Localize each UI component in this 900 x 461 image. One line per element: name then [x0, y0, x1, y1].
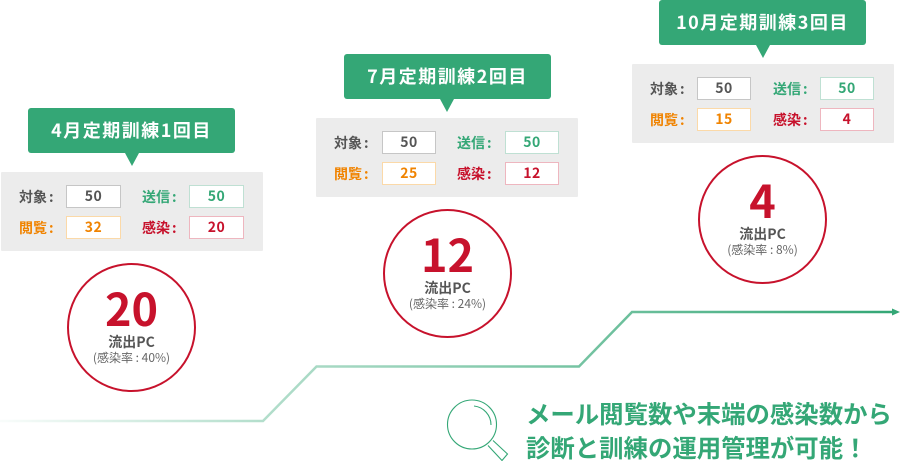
group: April training — [1, 108, 263, 392]
group: October training — [632, 0, 894, 284]
circle: April result: 20 — [105, 274, 158, 339]
panel: April stats: 32 — [85, 217, 102, 237]
panel: October stats: 4 — [843, 109, 851, 129]
pointer — [440, 99, 454, 112]
circle: April result — [67, 263, 196, 392]
panel: October stats: 15 — [715, 109, 733, 129]
group: July training — [316, 54, 578, 338]
panel: April stats: 50 — [85, 186, 102, 206]
circle: July result — [383, 209, 512, 338]
panel: October stats: 閲覧: — [650, 110, 685, 130]
heading: October: 10月定期訓練3回目 — [676, 9, 849, 35]
heading: July — [344, 54, 551, 99]
panel: October stats: 50 — [715, 78, 733, 98]
panel: July stats: 閲覧: — [334, 164, 369, 184]
panel: July stats: 12 — [523, 163, 541, 183]
panel: July stats: 25 — [400, 163, 418, 183]
panel: April stats: 閲覧: — [19, 218, 54, 238]
circle: April result: (感染率 : 40%) — [93, 349, 170, 366]
panel: July stats: 50 — [400, 132, 418, 152]
message text — [526, 396, 892, 461]
circle: July result: (感染率 : 24%) — [409, 295, 486, 312]
panel: October stats: 感染: — [773, 110, 808, 130]
panel: July stats — [316, 118, 578, 197]
panel: July stats: 対象: — [334, 133, 369, 153]
panel: October stats: 50 — [838, 78, 856, 98]
heading: October — [659, 0, 866, 45]
panel: October stats: 送信: — [773, 79, 808, 99]
panel: April stats: 50 — [208, 186, 225, 206]
icon: magnifying glass — [446, 400, 508, 461]
panel: April stats: 送信: — [142, 187, 177, 207]
circle: October result: (感染率 : 8%) — [727, 241, 798, 258]
panel: April stats — [1, 172, 263, 251]
panel: October stats: 対象: — [650, 79, 685, 99]
heading: April — [28, 108, 235, 153]
heading: July: 7月定期訓練2回目 — [367, 63, 528, 89]
circle: October result: 流出PC — [739, 224, 786, 244]
panel: October stats — [632, 64, 894, 143]
circle: October result — [698, 155, 827, 284]
panel: July stats: 感染: — [457, 164, 492, 184]
panel: July stats: 送信: — [457, 133, 492, 153]
panel: April stats: 感染: — [142, 218, 177, 238]
progress line arrow — [8, 308, 900, 422]
circle: July result: 流出PC — [424, 278, 471, 298]
panel: April stats: 20 — [208, 217, 225, 237]
panel: April stats: 対象: — [19, 187, 54, 207]
circle: October result: 4 — [749, 166, 776, 231]
circle: July result: 12 — [421, 220, 474, 285]
pointer — [756, 45, 770, 58]
message text: メール閲覧数や末端の感染数から — [526, 396, 892, 431]
pointer — [125, 153, 139, 166]
panel: July stats: 50 — [523, 132, 541, 152]
heading: April: 4月定期訓練1回目 — [51, 117, 212, 143]
circle: April result: 流出PC — [108, 332, 155, 352]
